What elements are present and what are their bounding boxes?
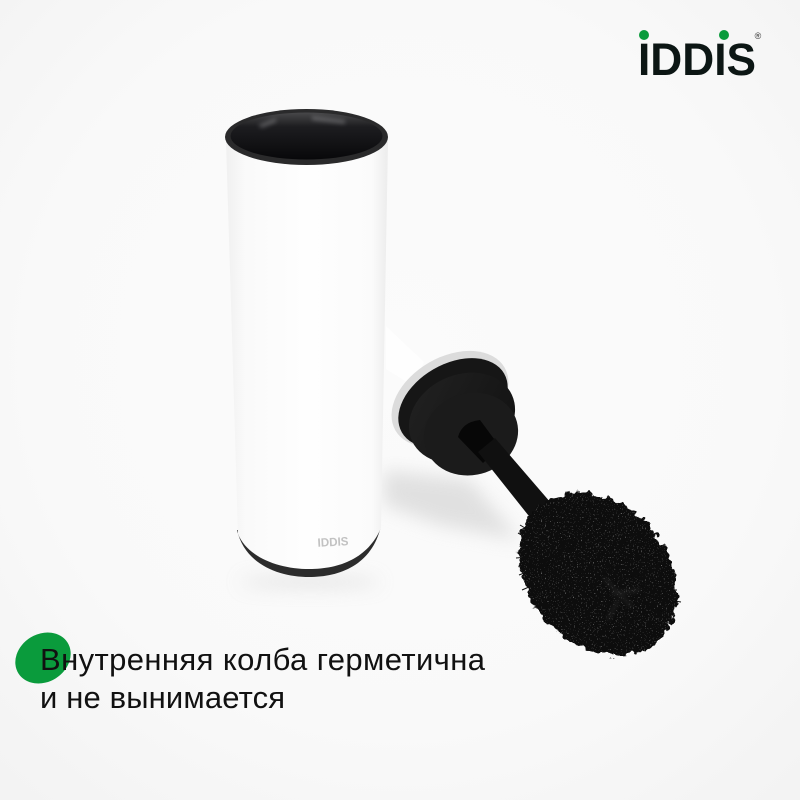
logo dots xyxy=(639,30,729,40)
brush stem xyxy=(478,438,557,530)
inner highlights xyxy=(258,116,345,128)
brush cap front disk xyxy=(415,382,527,486)
caption line 2: и не вынимается xyxy=(40,680,285,715)
soft shadows on the surface xyxy=(240,470,520,587)
logo wordmark: IDDIS xyxy=(638,34,756,85)
small logo on cylinder: IDDIS xyxy=(317,534,349,550)
cylinder inner wall xyxy=(230,112,382,160)
cylinder body xyxy=(226,140,388,569)
cylinder top opening rim xyxy=(225,109,388,165)
registered mark: ® xyxy=(755,31,762,41)
white cylinder holder xyxy=(225,109,388,577)
brush cap body xyxy=(394,356,530,480)
brush handle white upper part xyxy=(386,326,424,386)
bristle core highlight xyxy=(604,578,640,620)
caption text xyxy=(40,642,486,715)
brush cap rear disk xyxy=(382,340,524,466)
brush head bristles xyxy=(486,460,710,688)
cylinder bottom ring xyxy=(237,526,381,577)
brush collar xyxy=(458,420,500,463)
loose bristle tips xyxy=(516,491,681,630)
green accent blob xyxy=(6,622,80,694)
brush xyxy=(374,331,710,688)
caption line 1: Внутренняя колба герметична xyxy=(40,642,486,677)
logo IDDIS xyxy=(638,30,762,85)
brush cap rim xyxy=(374,331,526,467)
